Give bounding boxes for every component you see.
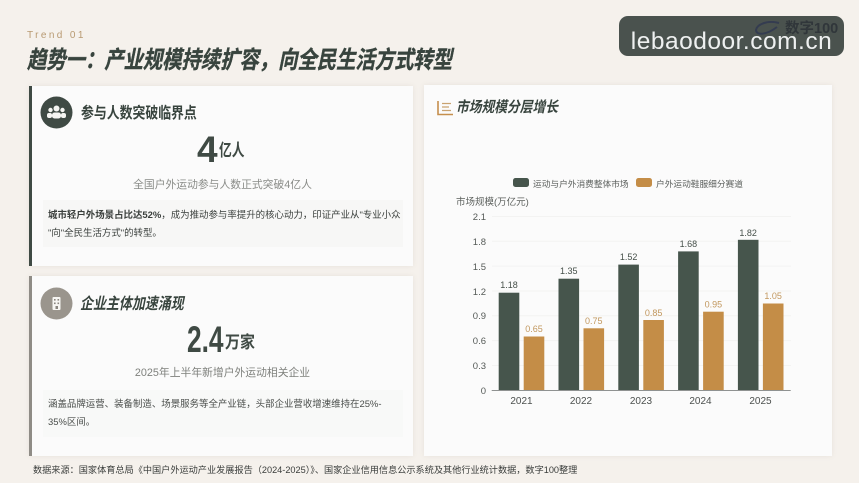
description: 全国户外运动参与人数正式突破4亿人: [133, 179, 312, 191]
heading: 参与人数突破临界点: [81, 105, 197, 122]
dark value labels: 1.18: [500, 280, 518, 290]
orange value labels: 1.05: [764, 291, 782, 301]
x axis labels: 2025: [749, 396, 772, 407]
dark value labels: [500, 228, 757, 290]
x axis labels: 2024: [689, 396, 712, 407]
x axis labels: 2022: [570, 396, 593, 407]
y axis labels: 0.3: [473, 361, 486, 372]
heading: 市场规模分层增长: [456, 99, 558, 116]
note: "向"全民生活方式"的转型。: [48, 228, 162, 238]
icon: building: [40, 288, 72, 320]
y axis labels: 1.2: [473, 287, 486, 298]
axis title: 市场规模(万亿元): [456, 196, 529, 208]
orange value labels: 0.65: [525, 324, 543, 334]
dark value labels: 1.35: [560, 266, 578, 276]
note: 涵盖品牌运营、装备制造、场景服务等全产业链，头部企业营收增速维持在25%-: [48, 399, 381, 410]
panel: market chart: [424, 85, 832, 456]
big number: 万家: [225, 333, 255, 352]
orange value labels: 0.85: [645, 308, 662, 318]
panel: enterprises: [29, 276, 413, 456]
big number: 4: [197, 129, 218, 170]
icon: chart glyph: [437, 101, 453, 116]
note: 35%区间。: [48, 416, 95, 428]
note: [43, 390, 403, 437]
legend: 运动与户外消费整体市场: [533, 178, 629, 189]
legend: 户外运动鞋服细分赛道: [656, 178, 743, 189]
dark value labels: 1.82: [739, 228, 757, 238]
big number: [197, 129, 244, 170]
y axis labels: 0.9: [473, 311, 486, 322]
y axis labels: 2.1: [473, 212, 486, 223]
watermark badge: [619, 16, 844, 56]
logo wordmark: 数字100: [785, 21, 838, 37]
x axis: [492, 390, 791, 392]
title: 趋势一：产业规模持续扩容，向全民生活方式转型: [27, 47, 452, 74]
orange value labels: [525, 291, 782, 334]
y axis labels: 0.6: [473, 336, 486, 347]
x axis labels: 2021: [510, 396, 533, 407]
logo swoosh: [755, 21, 780, 35]
y axis labels: 0: [481, 386, 486, 397]
bar chart: [456, 178, 791, 407]
icon: people: [40, 96, 72, 128]
source footnote: 数据来源：国家体育总局《中国户外运动产业发展报告（2024-2025）》、国家企业信用信息公示系统及其他行业统计数据，数字100整理: [33, 465, 577, 475]
legend: [513, 178, 743, 189]
logo: 数字100: [755, 20, 838, 37]
eyebrow: Trend 01: Trend 01: [27, 30, 86, 41]
big number: 2.4: [187, 319, 224, 360]
y axis labels: 1.8: [473, 237, 486, 248]
description: 2025年上半年新增户外运动相关企业: [135, 367, 310, 379]
big number: [187, 319, 255, 360]
x axis labels: [510, 396, 772, 407]
orange value labels: 0.95: [705, 300, 722, 310]
dark bars: [499, 240, 758, 390]
panel: participants: [29, 86, 413, 266]
y axis labels: 1.5: [473, 262, 486, 273]
x axis labels: 2023: [630, 396, 653, 407]
note: [43, 200, 403, 247]
dark value labels: 1.52: [620, 252, 637, 262]
watermark badge: lebaodoor.com.cn: [631, 28, 832, 55]
dark value labels: 1.68: [680, 239, 697, 249]
note: 城市轻户外场景占比达52%，成为推动参与率提升的核心动力，印证产业从"专业小众: [48, 210, 401, 221]
y axis labels: [473, 212, 486, 397]
heading: 企业主体加速涌现: [80, 296, 184, 313]
orange bars: [524, 304, 784, 390]
orange value labels: 0.75: [585, 316, 603, 326]
big number: 亿人: [219, 141, 244, 160]
